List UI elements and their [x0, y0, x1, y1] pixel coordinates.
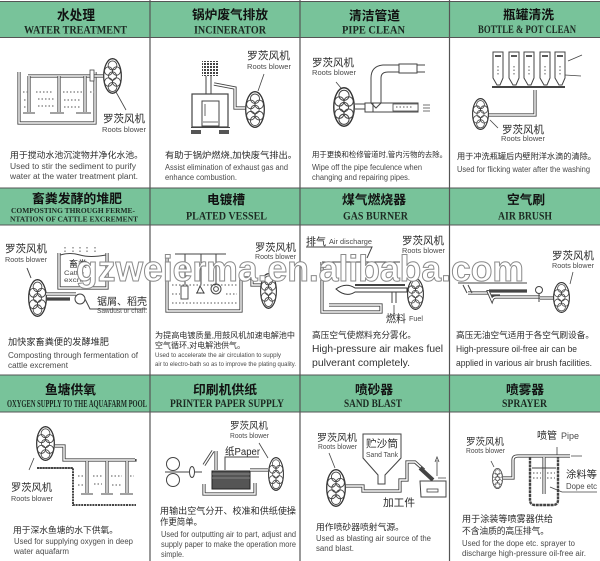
- heading: oxygen supply: OXYGEN SUPPLY TO THE AQUAFARM POOL: [7, 399, 147, 410]
- description: printer paper supply: Used for outputting air to part, adjust and: [161, 530, 296, 539]
- diagram: pipe: [334, 64, 430, 126]
- label: roots blower: 罗茨风机: [103, 112, 145, 125]
- heading: oxygen supply: [7, 382, 147, 410]
- heading: printer paper supply: PRINTER PAPER SUPPLY: [170, 396, 284, 410]
- description: water treatment: 用于搅动水池沉淀物并净化水池。: [10, 149, 143, 160]
- label: dope: Dope etc: [566, 482, 597, 491]
- label: fuel: 燃料: [386, 312, 406, 325]
- diagram: printer: [165, 443, 283, 494]
- description: oxygen supply: [13, 524, 134, 556]
- label: dope: [566, 468, 597, 491]
- heading: sprayer: 喷雾器: [506, 383, 544, 397]
- label: dope: 涂料等: [566, 468, 597, 481]
- diagram: air brush line: [458, 272, 573, 312]
- description: sand blast: Used as blasting air source of the: [316, 534, 432, 543]
- description: printer paper supply: supply paper to make the operation more: [161, 540, 296, 549]
- label: roots blower: Roots blower: [312, 68, 356, 77]
- description: composting: [8, 336, 139, 370]
- description: oxygen supply: 用于深水鱼塘的水下供氧。: [13, 524, 118, 535]
- description: composting: Composting through fermentation of: [8, 351, 139, 360]
- label: roots blower: Roots blower: [230, 433, 270, 440]
- panel: sand blast: [316, 382, 446, 553]
- heading: air brush: [498, 192, 553, 222]
- label: cattle excrement: excre: [64, 278, 85, 284]
- heading: composting: COMPOSTING THROUGH FERME-: [11, 206, 136, 215]
- label: pipe: 喷管: [537, 429, 557, 442]
- heading: pipe clean: PIPE CLEAN: [342, 22, 405, 36]
- heading: incinerator: 锅炉废气排放: [192, 7, 268, 22]
- heading: pipe clean: 清洁管道: [349, 8, 400, 23]
- label: roots blower: 罗茨风机: [502, 123, 544, 136]
- heading: plated vessel: PLATED VESSEL: [186, 208, 267, 222]
- label: roots blower: [247, 49, 291, 71]
- description: plated vessel: [155, 330, 296, 368]
- label: roots blower: Roots blower: [102, 125, 146, 134]
- heading: oxygen supply: 鱼塘供氧: [45, 382, 96, 397]
- header band: row 3: [0, 375, 600, 412]
- label: roots blower: [230, 420, 270, 440]
- label: air discharge: 排气: [306, 235, 326, 248]
- panel: pipe clean: [312, 8, 447, 182]
- label: roots blower: Roots blower: [466, 448, 506, 455]
- label: roots blower: 罗茨风机: [255, 241, 297, 254]
- label: roots blower: [255, 241, 297, 261]
- description: composting: cattle excrement: [8, 361, 69, 370]
- panel: composting: [0, 188, 600, 370]
- description: oxygen supply: water aquafarm: [13, 547, 69, 556]
- label: roots blower: Roots blower: [501, 134, 545, 143]
- panel: air brush: [456, 192, 594, 368]
- heading: plated vessel: 电镀槽: [207, 192, 245, 207]
- diagram: fish pond: [29, 427, 136, 505]
- label: roots blower: [402, 234, 445, 255]
- description: plated vessel: 为提高电镀质量,用鼓风机加速电解池中: [155, 330, 295, 340]
- heading: air brush: AIR BRUSH: [498, 208, 553, 222]
- heading: sand blast: 喷砂器: [355, 382, 393, 397]
- description: printer paper supply: simple.: [161, 550, 184, 559]
- description: oxygen supply: Used for supplying oxygen in deep: [14, 537, 134, 546]
- heading: printer paper supply: 印刷机供纸: [193, 382, 257, 397]
- panel: plated vessel: [155, 192, 297, 368]
- description: incinerator: Assist elimination of exhaust gas and: [165, 163, 288, 172]
- label: air discharge: [306, 235, 372, 248]
- description: air brush: 高压无油空气适用于各空气刷设备。: [456, 330, 594, 340]
- description: plated vessel: 空气循环,对电解池供气。: [155, 340, 245, 350]
- heading: sprayer: SPRAYER: [502, 396, 547, 410]
- diagram: furnace: [191, 61, 264, 134]
- heading: gas burner: 煤气燃烧器: [342, 192, 406, 207]
- diagram: bottles: [473, 52, 582, 129]
- heading: plated vessel: [186, 192, 267, 222]
- label: sawdust: [97, 295, 147, 315]
- label: roots blower: 罗茨风机: [230, 420, 268, 432]
- label: fuel: Fuel: [409, 316, 423, 323]
- heading: pipe clean: [342, 8, 405, 36]
- description: incinerator: 有助于锅炉燃烧,加快废气排出。: [165, 149, 297, 160]
- label: sawdust: 锯屑、稻壳: [97, 295, 147, 308]
- heading: air brush: 空气刷: [507, 192, 545, 207]
- description: plated vessel: Used to accelerate the air circulation to supply: [155, 352, 282, 359]
- label: roots blower: [102, 112, 146, 134]
- heading: bottle and pot clean: [478, 7, 576, 36]
- label: roots blower: [552, 249, 594, 270]
- watermark: gzweierma.en.alibaba.com: [76, 248, 524, 289]
- description: printer paper supply: [160, 505, 296, 559]
- label: cattle excrement: 畜粪: [69, 258, 87, 269]
- panel: gas burner: [306, 192, 445, 369]
- label: roots blower: Roots blower: [11, 494, 53, 503]
- label: roots blower: Roots blower: [247, 62, 291, 71]
- description: composting: 加快家畜粪便的发酵堆肥: [8, 336, 109, 347]
- description: plated vessel: air to electro-bath so as to improve the plating quality.: [155, 361, 296, 368]
- heading: water treatment: 水处理: [57, 7, 95, 23]
- label: roots blower: Roots blower: [255, 252, 296, 261]
- panel: sprayer: [462, 383, 597, 558]
- label: roots blower: 罗茨风机: [312, 56, 354, 69]
- description: pipe clean: changing and repairing pipes.: [312, 173, 410, 182]
- description: sprayer: 用于涂装等喷雾器供给: [462, 513, 553, 524]
- label: pipe: Pipe: [561, 431, 579, 441]
- label: roots blower: [466, 436, 506, 455]
- panel: incinerator: [165, 7, 297, 182]
- label: roots blower: [312, 56, 356, 77]
- label: roots blower: 罗茨风机: [247, 49, 291, 62]
- heading: composting: [10, 191, 138, 224]
- diagram: burner: [306, 247, 423, 314]
- label: air discharge: Air discharge: [329, 237, 372, 246]
- heading: incinerator: INCINERATOR: [194, 22, 266, 36]
- description: incinerator: enhance combustion.: [165, 173, 237, 182]
- description: sprayer: 不含油质的高压排气。: [462, 525, 549, 536]
- description: incinerator: [165, 149, 297, 182]
- description: sand blast: 用作喷砂器喷射气源。: [316, 522, 404, 532]
- heading: gas burner: GAS BURNER: [343, 208, 408, 222]
- label: roots blower: Roots blower: [5, 255, 47, 264]
- panel: printer paper supply: [160, 382, 296, 559]
- heading: sand blast: SAND BLAST: [344, 396, 402, 410]
- label: paper: 纸Paper: [225, 445, 261, 458]
- description: gas burner: [312, 330, 443, 369]
- label: roots blower: 罗茨风机: [402, 234, 444, 247]
- description: bottle clean: [457, 151, 596, 174]
- description: water treatment: [9, 149, 143, 181]
- label: roots blower: [317, 431, 358, 451]
- label: fuel: [386, 312, 423, 325]
- heading: gas burner: [342, 192, 408, 222]
- description: pipe clean: [312, 149, 447, 182]
- description: sprayer: discharge high-pressure oil-free air.: [462, 549, 586, 558]
- heading: incinerator: [192, 7, 268, 36]
- description: printer paper supply: 用输出空气分开、校准和供纸使操: [160, 505, 296, 516]
- heading: sand blast: [344, 382, 402, 410]
- header band: row 2: [0, 188, 600, 225]
- label: cattle excrement: Cattle: [64, 271, 85, 277]
- label: sand tank: 贮沙筒: [366, 437, 398, 450]
- description: bottle clean: Used for flicking water after the washing: [457, 165, 590, 174]
- description: gas burner: 高压空气使燃料充分雾化。: [312, 330, 416, 340]
- label: roots blower: 罗茨风机: [466, 436, 504, 448]
- label: roots blower: Roots blower: [318, 444, 358, 451]
- description: sprayer: Used for the dope etc. sprayer to: [462, 539, 576, 548]
- description: sand blast: sand blast.: [316, 544, 354, 553]
- label: roots blower: [11, 481, 53, 503]
- label: roots blower: [5, 242, 47, 264]
- description: sprayer: [462, 513, 586, 558]
- heading: water treatment: [24, 7, 127, 36]
- description: air brush: applied in various air brush facilities.: [456, 358, 592, 368]
- label: roots blower: 罗茨风机: [317, 431, 357, 444]
- description: sand blast: [316, 522, 432, 553]
- heading: bottle and pot clean: 瓶罐清洗: [503, 7, 554, 22]
- description: air brush: [456, 330, 594, 368]
- label: sawdust: Sawdust or chaff.: [97, 306, 147, 315]
- diagram: compost tank: [27, 247, 147, 316]
- heading: water treatment: WATER TREATMENT: [24, 22, 127, 36]
- description: gas burner: High-pressure air makes fuel: [312, 344, 443, 355]
- label: pipe: [537, 429, 579, 442]
- diagram: sand blast: [327, 434, 446, 506]
- description: water treatment: water at the water treatment plant.: [9, 172, 138, 181]
- description: pipe clean: Wipe off the pipe feculence when: [312, 163, 422, 172]
- label: roots blower: 罗茨风机: [11, 481, 53, 494]
- label: roots blower: 罗茨风机: [5, 242, 47, 255]
- label: roots blower: Roots blower: [402, 246, 445, 255]
- diagram: water treatment tank: [19, 59, 126, 123]
- description: gas burner: pulverant completely.: [312, 358, 410, 369]
- heading: composting: 畜粪发酵的堆肥: [32, 191, 122, 206]
- description: pipe clean: 用于更换和检修管道时,管内污物的去除。: [312, 149, 447, 159]
- label: roots blower: Roots blower: [552, 261, 594, 270]
- label: roots blower: 罗茨风机: [552, 249, 594, 262]
- panel: bottle and pot clean: [457, 7, 596, 174]
- diagram: sprayer: [491, 447, 597, 505]
- diagram: plating tank: [167, 254, 276, 311]
- label: roots blower: [501, 123, 545, 143]
- label: sand tank: Sand Tank: [366, 452, 398, 459]
- panel: water treatment: [0, 2, 600, 181]
- heading: sprayer: [502, 383, 547, 410]
- label: cattle excrement: [64, 258, 87, 284]
- heading: composting: NTATION OF CATTLE EXCREMENT: [10, 214, 138, 224]
- description: air brush: High-pressure oil-free air can be: [456, 344, 577, 354]
- description: water treatment: Used to stir the sediment to purify: [10, 162, 136, 171]
- description: printer paper supply: 作更简单。: [160, 516, 202, 527]
- description: bottle clean: 用于冲洗瓶罐后内壁附洋水滴的清除。: [457, 151, 596, 161]
- panel: oxygen supply: [0, 375, 600, 556]
- heading: printer paper supply: [170, 382, 284, 410]
- header band: water treatment: [0, 2, 600, 37]
- label: sand tank: [366, 437, 398, 459]
- label: workpiece: 加工件: [383, 497, 415, 509]
